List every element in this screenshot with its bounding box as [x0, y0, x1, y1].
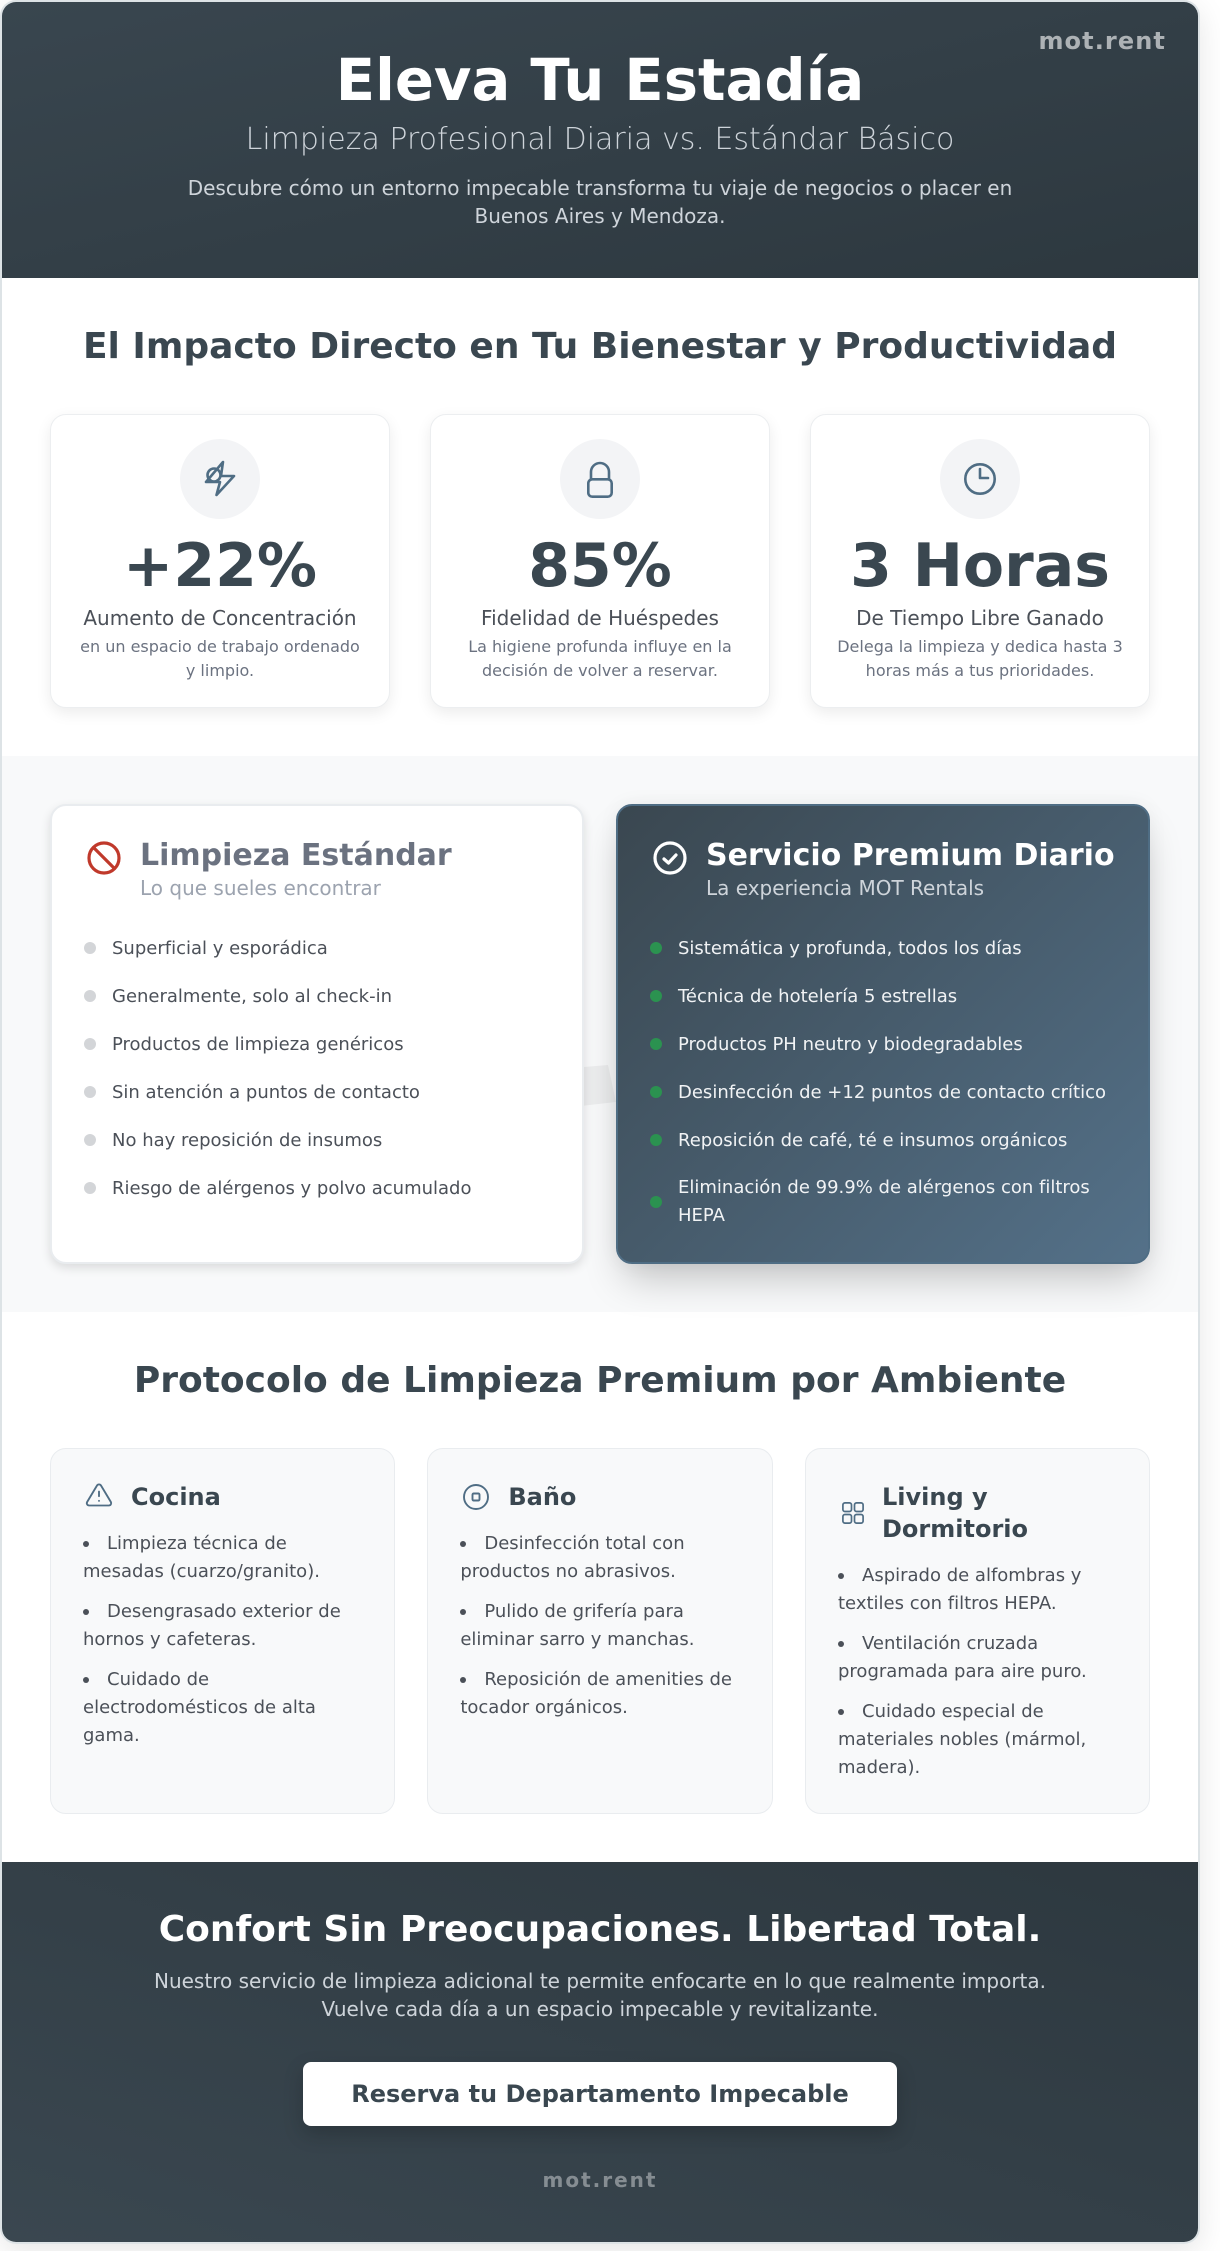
icon: check circle — [653, 841, 687, 875]
stat description — [80, 637, 360, 680]
room card: kitchen — [50, 1448, 395, 1814]
title: Eleva Tu Estadía — [336, 47, 864, 114]
bullet list: standard: Superficial y esporádica — [112, 938, 328, 959]
stat description — [468, 637, 732, 680]
stat description: horas más a tus prioridades. — [866, 661, 1094, 680]
icon: circled square — [463, 1484, 489, 1510]
panel: comparison section — [2, 756, 1198, 1312]
panel: premium service — [616, 804, 1150, 1264]
stat description: La higiene profunda influye en la — [468, 637, 732, 656]
room checklist: Pulido de grifería para eliminar sarro y manchas. — [460, 1601, 695, 1650]
icon: four squares — [842, 1502, 864, 1524]
footer call to action — [2, 1862, 1198, 2242]
stat description — [837, 637, 1123, 680]
button — [303, 2062, 897, 2126]
stat number: 3 Horas — [850, 531, 1110, 601]
heading: Protocolo de Limpieza Premium por Ambiente — [134, 1360, 1066, 1401]
icon: clock — [940, 439, 1020, 519]
room checklist: Aspirado de alfombras y textiles con filtros HEPA. — [838, 1565, 1081, 1614]
stat card: concentration — [50, 414, 390, 708]
header banner — [2, 2, 1198, 278]
room title: Living y — [882, 1483, 988, 1511]
bullet list: standard: Productos de limpieza genéricos — [112, 1034, 404, 1055]
room checklist: Ventilación cruzada programada para aire puro. — [838, 1633, 1087, 1682]
panel: protocol section — [50, 1360, 1150, 1814]
bullet list: premium: Productos PH neutro y biodegradables — [678, 1034, 1023, 1055]
icon: prohibited — [87, 841, 121, 875]
room checklist: Desinfección total con productos no abrasivos. — [460, 1533, 685, 1582]
footer heading: Confort Sin Preocupaciones. Libertad Total. — [159, 1909, 1041, 1950]
room checklist: Limpieza técnica de mesadas (cuarzo/granito). — [83, 1533, 320, 1582]
bullet list: standard: No hay reposición de insumos — [112, 1130, 382, 1151]
footer text: Nuestro servicio de limpieza adicional te permite enfocarte en lo que realmente importa. — [154, 1968, 1046, 1992]
stat description: decisión de volver a reservar. — [482, 661, 718, 680]
room title: Cocina — [131, 1483, 221, 1511]
footer text: Vuelve cada día a un espacio impecable y revitalizante. — [322, 1996, 878, 2020]
room card: bathroom — [427, 1448, 773, 1814]
bullet list: premium: HEPA — [678, 1205, 725, 1226]
icon: lightning bolt — [180, 439, 260, 519]
bullet list: premium: Sistemática y profunda, todos los días — [678, 938, 1022, 959]
room checklist: Cuidado especial de materiales nobles (mármol, madera). — [838, 1701, 1086, 1778]
bullet list: premium: Desinfección de +12 puntos de contacto crítico — [678, 1082, 1106, 1103]
brand label: mot.rent — [1038, 27, 1166, 55]
bullet list: standard: Generalmente, solo al check-in — [112, 986, 392, 1007]
bullet list: premium: Técnica de hotelería 5 estrellas — [678, 986, 957, 1007]
subtitle: Limpieza Profesional Diaria vs. Estándar Básico — [246, 122, 954, 157]
room title: Baño — [508, 1483, 576, 1511]
stat number: 85% — [528, 531, 672, 601]
bullet list: standard — [84, 938, 472, 1199]
bullet list: standard: Sin atención a puntos de contacto — [112, 1082, 420, 1103]
card title: Servicio Premium Diario — [706, 838, 1115, 873]
bullet list: standard: Riesgo de alérgenos y polvo acumulado — [112, 1178, 472, 1199]
room checklist: Desengrasado exterior de hornos y cafeteras. — [83, 1601, 341, 1650]
room checklist — [83, 1533, 341, 1746]
room checklist: Cuidado de electrodomésticos de alta gama. — [83, 1669, 316, 1746]
stat card: loyalty — [430, 414, 770, 708]
room checklist — [460, 1533, 732, 1718]
stat description: y limpio. — [186, 661, 254, 680]
stat label: Aumento de Concentración — [83, 606, 357, 630]
room title — [882, 1483, 1028, 1543]
icon: lock — [560, 439, 640, 519]
stat label: Fidelidad de Huéspedes — [481, 606, 719, 630]
card subtitle: Lo que sueles encontrar — [140, 876, 381, 900]
stat number: +22% — [123, 531, 317, 601]
stat description: Delega la limpieza y dedica hasta 3 — [837, 637, 1123, 656]
room checklist — [838, 1565, 1087, 1778]
intro text: Buenos Aires y Mendoza. — [475, 204, 725, 228]
footer brand: mot.rent — [543, 2168, 657, 2192]
icon: warning triangle — [86, 1484, 112, 1506]
heading: El Impacto Directo en Tu Bienestar y Productividad — [83, 326, 1117, 367]
footer text — [154, 1968, 1046, 2020]
panel: standard cleaning — [50, 804, 584, 1264]
connector shape between cards — [584, 1065, 616, 1106]
bullet list: premium: Reposición de café, té e insumos orgánicos — [678, 1130, 1067, 1151]
intro text: Descubre cómo un entorno impecable transforma tu viaje de negocios o placer en — [188, 176, 1012, 200]
card subtitle: La experiencia MOT Rentals — [706, 876, 984, 900]
intro text — [188, 176, 1012, 228]
room title: Dormitorio — [882, 1515, 1028, 1543]
card title: Limpieza Estándar — [140, 838, 452, 873]
bullet list: premium: Eliminación de 99.9% de alérgenos con filtros — [678, 1177, 1090, 1198]
room card: living and bedroom — [805, 1448, 1150, 1814]
bullet list: premium — [650, 938, 1106, 1226]
stat label: De Tiempo Libre Ganado — [856, 606, 1104, 630]
panel: impact section — [49, 326, 1151, 714]
room checklist: Reposición de amenities de tocador orgánicos. — [460, 1669, 732, 1718]
button: Reserva tu Departamento Impecable — [351, 2080, 849, 2108]
stat description: en un espacio de trabajo ordenado — [80, 637, 360, 656]
stat card: free time — [810, 414, 1150, 708]
